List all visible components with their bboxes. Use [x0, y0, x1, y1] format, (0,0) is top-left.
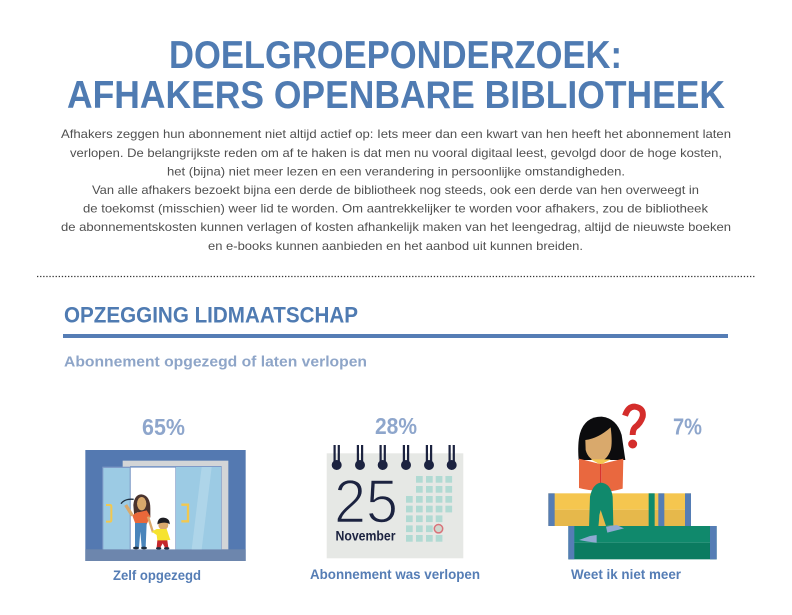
- label: abonnement was verlopen: Abonnement was verlopen: [310, 566, 480, 582]
- label: weet ik niet meer: Weet ik niet meer: [571, 566, 682, 582]
- question mark: [625, 407, 643, 446]
- title: AFHAKERS OPENBARE BIBLIOTHEEK: [67, 74, 725, 117]
- stat: 28%: 28%: [375, 413, 417, 439]
- label: zelf opgezegd: Zelf opgezegd: [113, 567, 201, 583]
- intro text block: het (bijna) niet meer lezen en een verandering in persoonlijke omstandigheden.: [167, 164, 625, 178]
- hair: [578, 417, 625, 460]
- calendar month: November: [336, 528, 396, 544]
- calendar marked day: [434, 524, 443, 533]
- icon: sliding door: [85, 450, 246, 561]
- calendar rings: [332, 445, 456, 470]
- icon: calendar: [327, 445, 463, 558]
- stat: 65%: 65%: [142, 414, 185, 440]
- intro text block: [61, 127, 731, 253]
- shoes: [579, 535, 597, 543]
- panel: abonnement was verlopen: [310, 413, 480, 582]
- calendar day grid: [406, 476, 452, 542]
- intro text block: Van alle afhakers bezoekt bijna een derde de bibliotheek nog steeds, ook een derde van hen overweegt in: [92, 183, 699, 197]
- stat: 7%: 7%: [673, 414, 702, 440]
- figures: mother and child: [121, 494, 170, 549]
- green book: [568, 526, 717, 559]
- intro text block: Afhakers zeggen hun abonnement niet altijd actief op: Iets meer dan een kwart van hen heeft het abonnement laten: [61, 127, 731, 141]
- panel: weet ik niet meer: [548, 407, 717, 582]
- figure: mother: [121, 494, 153, 549]
- yellow book: [548, 493, 691, 526]
- intro text block: en e-books kunnen aanbieden en het aanbod uit kunnen breiden.: [208, 239, 583, 253]
- panel: zelf opgezegd: [85, 414, 246, 583]
- title: DOELGROEPONDERZOEK:: [169, 34, 622, 77]
- section subheading: Abonnement opgezegd of laten verlopen: [64, 354, 367, 370]
- section heading: OPZEGGING LIDMAATSCHAP: [64, 302, 358, 328]
- calendar date: 25: [334, 468, 398, 536]
- face: [585, 427, 612, 462]
- legs: [589, 483, 613, 535]
- open book: [579, 459, 623, 492]
- figure: child: [152, 518, 170, 549]
- icon: stack of books: [548, 493, 717, 559]
- icon: girl reading: [578, 407, 643, 543]
- intro text block: de toekomst (misschien) weer lid te worden. Om aantrekkelijker te worden voor afhakers, zou de bibliotheek: [83, 202, 709, 216]
- intro text block: verlopen. De belangrijkste reden om af te haken is dat men nu vooral digitaal leest, gevolgd door de hoge kosten,: [70, 146, 722, 160]
- intro text block: de abonnementskosten kunnen verlagen of kosten afhankelijk maken van het leengedrag, altijd de nieuwste boeken: [61, 220, 731, 234]
- collar: [591, 459, 611, 465]
- title: [67, 34, 725, 117]
